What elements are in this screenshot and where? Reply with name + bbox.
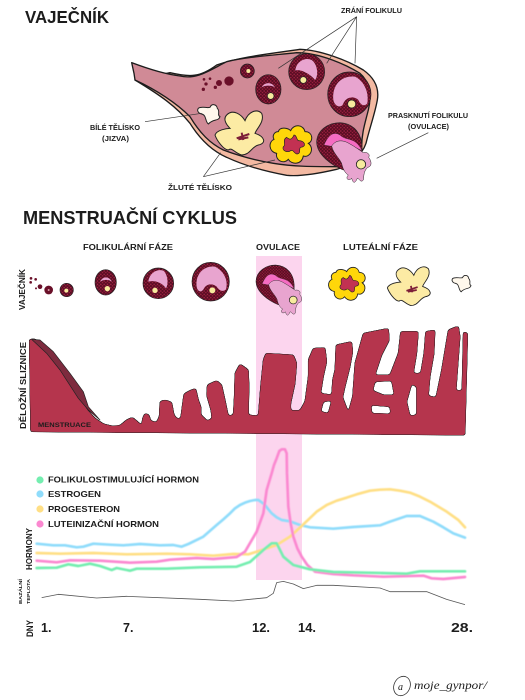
signature [391,674,489,698]
hormone chart [37,449,465,579]
axis label: endometrium: DĚLOŽNÍ SLIZNICE [17,342,28,429]
corpus albicans [452,275,471,292]
endometrium chart [29,326,468,435]
shedding layer [32,339,100,420]
legend: progesterone: PROGESTERON [48,505,120,514]
legend: LH: LUTEINIZAČNÍ HORMON [48,518,159,529]
yellow body, active [270,126,312,163]
title: ovary: VAJEČNÍK [25,6,109,27]
phase headings [83,242,418,252]
label: white body [90,123,140,143]
early follicles [29,277,53,294]
legend: LH [36,518,159,529]
follicle D [192,262,229,301]
ovary capsule [135,49,378,176]
label: ovulation: (OVULACE) [408,122,449,131]
label: menstruation: MENSTRUACE [38,422,92,429]
signature: a [398,682,403,693]
progesterone curve [37,489,465,556]
ovary row [29,262,471,306]
ovary body [132,53,370,167]
signature: moje_gynpor/ [414,678,489,692]
legend [36,474,199,529]
maturing follicle 1 [256,75,281,104]
phase headings: OVULACE [256,242,300,252]
axis label: days: DNY [25,620,35,637]
day ticks: 12. [252,621,270,635]
small follicle [240,64,254,78]
day ticks: 14. [298,621,316,635]
label: ovulation: PRASKNUTÍ FOLIKULU [388,111,468,120]
primordial follicles [202,76,234,91]
label: maturation: ZRÁNÍ FOLIKULU [341,6,402,15]
pale corpus [387,267,430,306]
axis label: ovary: VAJEČNÍK [16,269,27,310]
legend: FSH: FOLIKULOSTIMULUJÍCÍ HORMON [48,474,199,484]
leader lines [145,17,428,177]
label: white body: BÍLÉ TĚLÍSKO [90,123,140,132]
follicle B [95,270,116,295]
estrogen curve [37,500,465,547]
follicle A [60,283,73,297]
maturing follicle 3 [328,72,371,117]
FSH curve [37,543,465,574]
label: ovulation [388,111,468,131]
day ticks: 7. [123,621,133,635]
title: menstrual cycle: MENSTRUAČNÍ CYKLUS [23,207,237,228]
legend: estrogen: ESTROGEN [48,490,101,499]
axis label: basal temperature: TEPLOTA [26,578,31,604]
basal temperature curve [42,581,465,605]
label: white body: (JIZVA) [102,134,129,143]
phase headings: LUTEÁLNÍ FÁZE [343,242,418,252]
yellow body, pale [215,111,264,155]
maturing follicle 2 [289,54,325,90]
day ticks [41,621,473,635]
axis label: basal temperature: BAZÁLNÍ [16,578,23,604]
endometrium tissue [29,326,468,435]
LH curve [37,449,465,579]
day ticks: 28. [451,621,473,635]
ovulation band [256,256,302,580]
axis label: hormones: HORMONY [24,528,34,570]
corpus luteum [329,267,365,300]
label: yellow body: ŽLUTÉ TĚLÍSKO [168,183,232,192]
ruptured follicle, ovulation [256,265,302,315]
axis label: basal temperature [16,578,31,604]
white body [198,105,220,124]
phase headings: FOLIKULÁRNÍ FÁZE [83,242,173,252]
day ticks: 1. [41,621,51,635]
ovary diagram [132,17,428,182]
rupturing follicle [317,123,371,182]
follicle C [143,268,174,299]
